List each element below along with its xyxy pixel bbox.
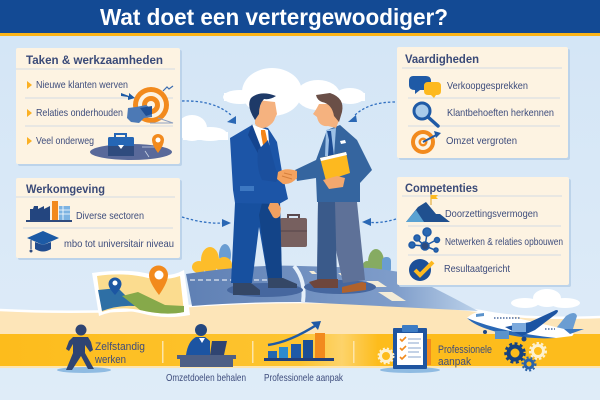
heading: Vaardigheden xyxy=(405,52,479,66)
text: mbo tot universitair niveau: mbo tot universitair niveau xyxy=(64,238,174,250)
text: Doorzettingsvermogen: Doorzettingsvermogen xyxy=(445,208,538,220)
shirt and tie xyxy=(251,124,271,165)
title: Wat doet een vertergewoodiger? xyxy=(100,4,448,30)
arrow: left top xyxy=(182,101,236,124)
plants xyxy=(192,244,391,275)
icon: factory and buildings xyxy=(26,201,72,222)
panel: Vaardigheden xyxy=(397,47,570,160)
handshake xyxy=(277,169,297,184)
icon: network xyxy=(409,228,440,252)
icon: walking person xyxy=(57,324,111,373)
text: Netwerken & relaties opbouwen: Netwerken & relaties opbouwen xyxy=(445,236,563,248)
arrow: right top xyxy=(348,102,395,122)
icon: airplane xyxy=(467,310,584,342)
person: right businessman xyxy=(295,93,372,293)
feature: Professionele aanpak chart xyxy=(264,321,344,384)
icon: target and arrow xyxy=(121,86,173,123)
feature: Professionele aanpak checklist: aanpak xyxy=(438,356,471,368)
feature: Zelfstandig werken xyxy=(57,324,145,373)
icon: magnifying glass xyxy=(414,103,438,126)
heading: Taken & werkzaamheden xyxy=(26,53,163,67)
list items: Relaties onderhouden xyxy=(36,107,123,119)
icon: clipboard xyxy=(380,325,440,373)
arm xyxy=(258,140,281,182)
text: Zelfstandig xyxy=(95,341,145,353)
road xyxy=(186,266,478,311)
panel: Werkomgeving xyxy=(16,178,182,260)
icon: mountains with flag xyxy=(406,195,450,222)
icon: check badge xyxy=(409,259,433,281)
shirt and tie xyxy=(325,128,336,156)
head xyxy=(255,100,277,128)
text: Verkoopgesprekken: Verkoopgesprekken xyxy=(447,80,528,92)
icon: map with pins xyxy=(92,266,190,317)
text: Omzetdoelen behalen xyxy=(166,372,246,384)
icon: briefcase on road xyxy=(90,134,172,160)
icon: handshake xyxy=(127,105,152,123)
shoes xyxy=(309,279,338,288)
legs xyxy=(231,203,282,283)
feature: Professionele aanpak checklist xyxy=(378,325,546,373)
arrow: right bottom xyxy=(362,218,396,226)
list items: Veel onderweg xyxy=(36,135,94,147)
folder xyxy=(320,152,350,181)
text: Professionele xyxy=(438,344,492,356)
text: Resultaatgericht: Resultaatgericht xyxy=(444,263,510,275)
icon: gears xyxy=(506,343,546,370)
jacket xyxy=(295,125,372,202)
legs xyxy=(317,202,365,283)
shoes xyxy=(233,278,297,295)
title banner xyxy=(0,0,600,36)
background clouds xyxy=(177,68,580,308)
person: left businessman xyxy=(230,93,307,295)
bottom ground: cream and yellow bands xyxy=(0,302,600,368)
icon: graduation cap xyxy=(27,231,59,252)
text: Omzet vergroten: Omzet vergroten xyxy=(446,135,517,147)
heading: Werkomgeving xyxy=(26,182,105,196)
icon: speech bubbles xyxy=(409,76,441,98)
icon: rising bar chart xyxy=(264,321,334,361)
heading: Competenties xyxy=(405,181,478,195)
icon: small gear xyxy=(378,348,394,364)
panel: Competenties xyxy=(397,177,571,287)
icon: target xyxy=(411,130,441,154)
panel: Taken & werkzaamheden xyxy=(16,48,182,166)
text: Diverse sectoren: Diverse sectoren xyxy=(76,210,144,222)
briefcase xyxy=(280,215,307,247)
arrow: left bottom xyxy=(182,217,231,227)
feature: Zelfstandig werken: werken xyxy=(94,354,126,366)
text: Klantbehoeften herkennen: Klantbehoeften herkennen xyxy=(447,107,554,119)
feature: Omzetdoelen behalen xyxy=(166,324,246,384)
icon: person at laptop xyxy=(177,324,236,367)
text: Professionele aanpak xyxy=(264,372,344,384)
jacket xyxy=(230,125,288,204)
head xyxy=(313,104,340,128)
list items xyxy=(27,79,128,147)
list items: Nieuwe klanten werven xyxy=(36,79,128,91)
